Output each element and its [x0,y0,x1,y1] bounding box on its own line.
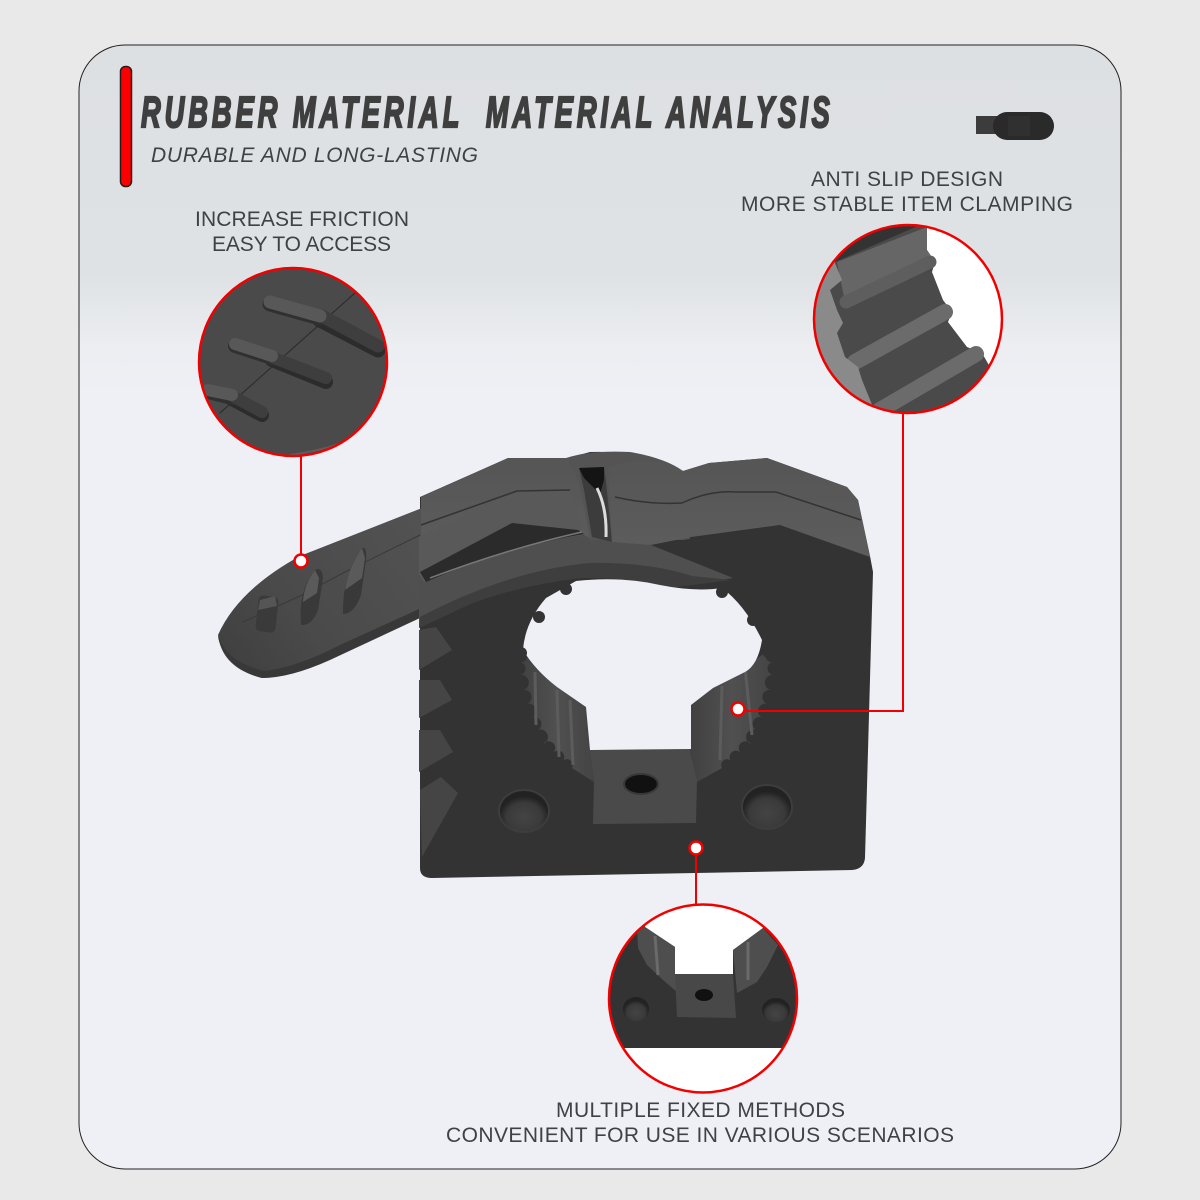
strap tab [218,508,470,678]
callout text: increase friction: INCREASE FRICTION [195,208,409,231]
ridge line [421,490,570,525]
zoom circle: friction ridges [199,268,390,456]
clamp body [420,452,873,878]
left side teeth [419,627,458,857]
zoom circle: fixing holes [610,906,796,1091]
title: RUBBER MATERIAL MATERIAL ANALYSIS [141,87,830,137]
folded top left block [421,458,590,572]
callout text: multiple fixed methods [446,1099,954,1147]
strap tab lower edge [218,604,430,678]
callout text: increase friction [195,208,409,256]
right wall ridges [720,668,752,760]
callout text: anti slip design: MORE STABLE ITEM CLAMPING [741,193,1073,216]
mounting hole right [742,785,792,829]
light edge under recess [430,532,582,578]
product: rubber clamp [218,452,873,878]
right inner wall [689,650,774,782]
mounting seat [590,748,697,824]
strap arch lower shade [419,563,732,628]
left wall ridges [535,672,573,765]
right top block [608,458,870,557]
opening teeth [515,583,773,659]
dark triangle under right block [651,525,780,575]
slot opening [579,467,604,494]
metal wire [597,488,606,537]
red accent bar [120,66,132,186]
center screw hole [624,774,658,794]
callout text: increase friction: EASY TO ACCESS [212,233,391,256]
top arch behind slot [566,452,690,540]
tab ridge 1 [255,595,279,633]
callout text: anti slip design [741,168,1073,216]
icon: small clamp thumbnail [976,112,1054,140]
tab ridge 3 [343,548,366,614]
clamp opening [523,579,762,750]
right top ridge line [615,492,861,520]
left inner wall [519,650,594,782]
folded top left lower face [419,490,582,582]
callout text: multiple fixed methods: CONVENIENT FOR USE IN VARIOUS SCENARIOS [446,1124,954,1147]
callout text: multiple fixed methods: MULTIPLE FIXED METHODS [556,1099,845,1122]
subtitle: DURABLE AND LONG-LASTING [151,144,478,167]
tab ridge 2 [301,569,323,625]
mounting hole left [499,790,549,832]
callout dots [294,554,744,854]
strap arch [419,535,733,628]
slot wall [579,467,612,542]
leader lines and ring outlines [199,225,1002,1092]
zoom circle: anti slip ridges [815,226,1001,412]
strap grooves on tab [243,535,420,622]
recess under block [420,523,584,582]
callout text: anti slip design: ANTI SLIP DESIGN [811,168,1003,191]
